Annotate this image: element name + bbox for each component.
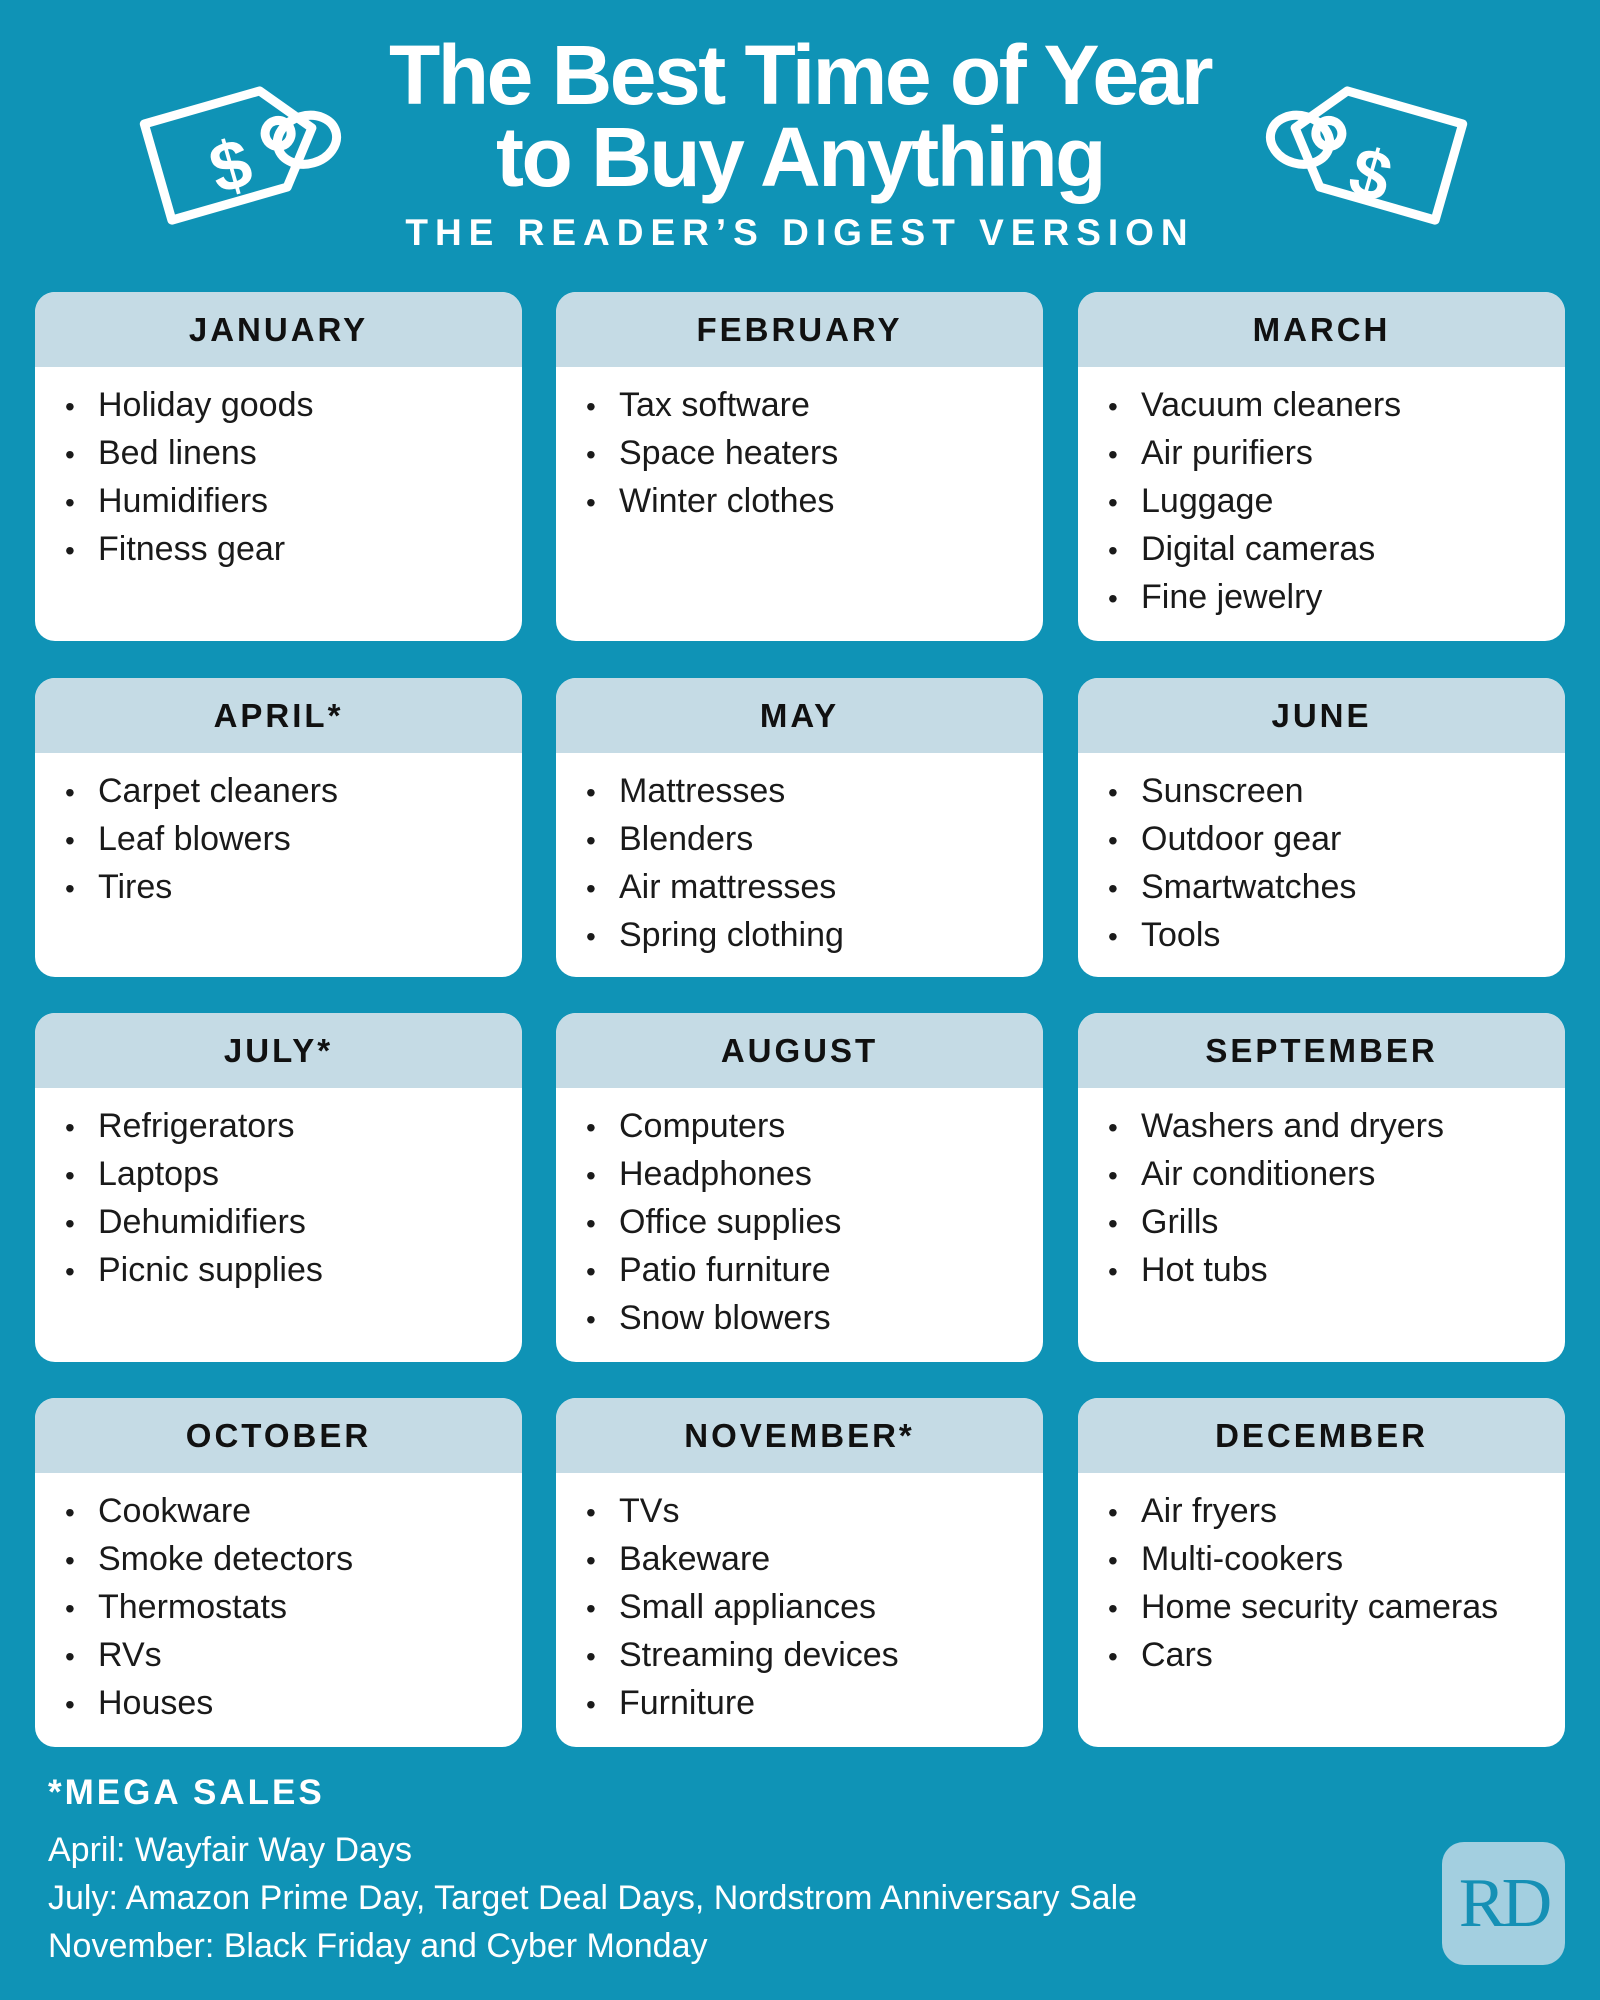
panel: april: APRIL* [214, 697, 343, 734]
panel: june: JUNE [1271, 697, 1372, 734]
panel: march: Fine jewelry [1141, 578, 1322, 616]
panel: november: NOVEMBER* [684, 1417, 915, 1454]
panel: june: Smartwatches [1141, 868, 1356, 906]
panel: march: MARCH [1253, 311, 1390, 348]
icon: left price tag: $ [201, 123, 260, 209]
panel: december: Air fryers [1141, 1492, 1277, 1530]
panel: march: Air purifiers [1141, 434, 1313, 472]
panel: july: Dehumidifiers [98, 1203, 306, 1241]
panel: october: OCTOBER [186, 1417, 371, 1454]
panel: may: Blenders [619, 820, 753, 858]
panel: january: Humidifiers [98, 482, 268, 520]
panel: september: Hot tubs [1141, 1251, 1268, 1289]
title: to Buy Anything [496, 110, 1104, 204]
panel: january: JANUARY [189, 311, 368, 348]
panel: may: Air mattresses [619, 868, 836, 906]
panel: february: Winter clothes [619, 482, 834, 520]
footnote list [48, 1831, 1137, 1965]
panel: november: TVs [619, 1492, 679, 1530]
footnote list: November: Black Friday and Cyber Monday [48, 1927, 708, 1965]
title: The Best Time of Year [389, 28, 1211, 122]
panel: february [556, 292, 1043, 641]
panel: october: Houses [98, 1684, 213, 1722]
panel: august: Headphones [619, 1155, 812, 1193]
logo: RD [1442, 1842, 1565, 1965]
panel: november: Furniture [619, 1684, 755, 1722]
title [389, 28, 1212, 204]
panel: august: Patio furniture [619, 1251, 831, 1289]
panel: july [35, 1013, 522, 1362]
panel: july: Picnic supplies [98, 1251, 323, 1289]
panel: february: Space heaters [619, 434, 838, 472]
panel: september: SEPTEMBER [1205, 1032, 1438, 1069]
panel: november: Streaming devices [619, 1636, 899, 1674]
footnote list: July: Amazon Prime Day, Target Deal Days, Nordstrom Anniversary Sale [48, 1879, 1137, 1917]
panel: may: MAY [760, 697, 839, 734]
icon: right price tag [1266, 86, 1468, 225]
panel: september: Air conditioners [1141, 1155, 1375, 1193]
panel: august: AUGUST [721, 1032, 878, 1069]
panel: november [556, 1398, 1043, 1747]
panel: march: Digital cameras [1141, 530, 1375, 568]
panel: september: Grills [1141, 1203, 1218, 1241]
panel: february: FEBRUARY [696, 311, 903, 348]
panel: august: Computers [619, 1107, 785, 1145]
panel: january: Holiday goods [98, 386, 313, 424]
footnote heading: *MEGA SALES [48, 1773, 325, 1812]
panel: december: Multi-cookers [1141, 1540, 1343, 1578]
panel: october [35, 1398, 522, 1747]
panel: october: Thermostats [98, 1588, 287, 1626]
panel: april: Tires [98, 868, 172, 906]
panel: may [556, 678, 1043, 977]
panel: september [1078, 1013, 1565, 1362]
panel: august [556, 1013, 1043, 1362]
panel: november: Small appliances [619, 1588, 876, 1626]
panel: february: Tax software [619, 386, 810, 424]
panel: january: Fitness gear [98, 530, 285, 568]
logo: RD: RD [1459, 1865, 1548, 1942]
panel: august: Snow blowers [619, 1299, 831, 1337]
panel: june: Tools [1141, 916, 1220, 954]
panel: january: Bed linens [98, 434, 257, 472]
panel: july: Laptops [98, 1155, 219, 1193]
icon: left price tag [140, 86, 342, 225]
footnote list: April: Wayfair Way Days [48, 1831, 412, 1869]
panel: may: Mattresses [619, 772, 785, 810]
panel: april: Carpet cleaners [98, 772, 338, 810]
panel: july: Refrigerators [98, 1107, 295, 1145]
panel: may: Spring clothing [619, 916, 844, 954]
panel: january [35, 292, 522, 641]
panel: november: Bakeware [619, 1540, 770, 1578]
panel: december: DECEMBER [1215, 1417, 1428, 1454]
icon: right price tag: $ [1341, 132, 1400, 217]
panel: september: Washers and dryers [1141, 1107, 1444, 1145]
panel: march: Vacuum cleaners [1141, 386, 1401, 424]
subtitle: THE READER’S DIGEST VERSION [405, 212, 1195, 253]
panel: october: Cookware [98, 1492, 251, 1530]
panel: december [1078, 1398, 1565, 1747]
panel: march [1078, 292, 1565, 641]
panel: october: Smoke detectors [98, 1540, 353, 1578]
panel: december: Cars [1141, 1636, 1213, 1674]
panel: june: Outdoor gear [1141, 820, 1341, 858]
panel: march: Luggage [1141, 482, 1273, 520]
panel: july: JULY* [224, 1032, 333, 1069]
panel: october: RVs [98, 1636, 162, 1674]
panel: june [1078, 678, 1565, 977]
panel: april: Leaf blowers [98, 820, 291, 858]
panel: december: Home security cameras [1141, 1588, 1498, 1626]
panel: april [35, 678, 522, 977]
panel: august: Office supplies [619, 1203, 841, 1241]
panel: june: Sunscreen [1141, 772, 1304, 810]
